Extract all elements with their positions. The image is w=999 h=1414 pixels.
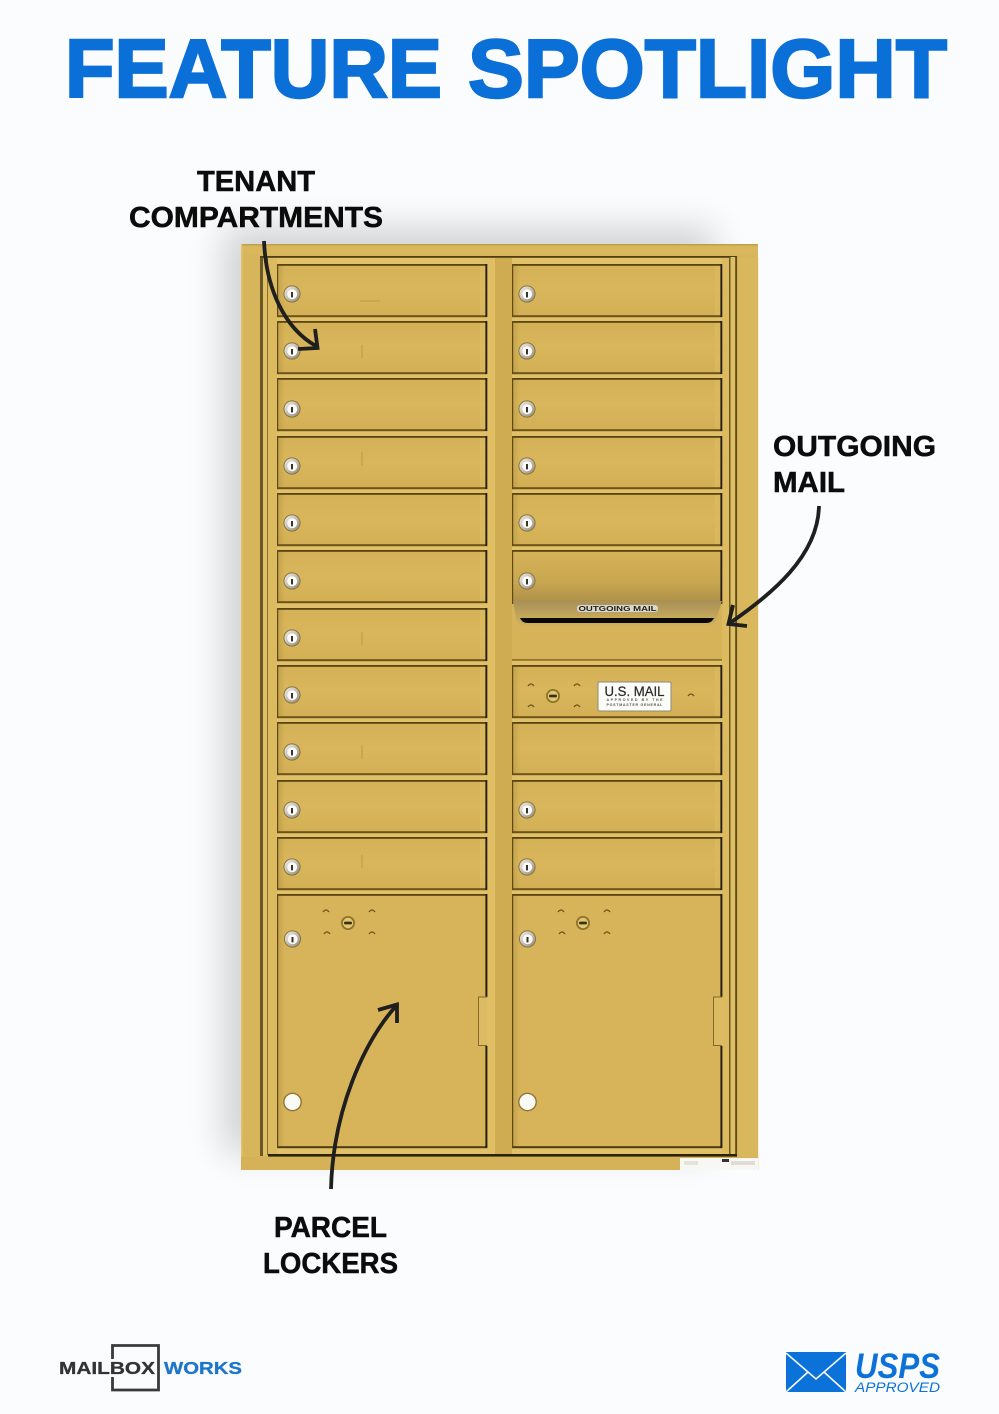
outgoing mail slot	[512, 601, 722, 661]
U.S. Mail plate	[598, 682, 671, 711]
title: FEATURE	[65, 22, 442, 115]
arrow: tenant compartments	[264, 241, 318, 349]
logo: Mailbox Works: WORKS	[164, 1358, 242, 1378]
left column compartments	[277, 264, 487, 890]
outer frame	[241, 244, 758, 1170]
logo: USPS Approved	[786, 1347, 940, 1395]
label: outgoing mail	[773, 431, 936, 499]
label: outgoing mail: MAIL	[773, 467, 845, 499]
parcel locker: right	[512, 894, 722, 1148]
title	[65, 22, 947, 115]
arrow: parcel lockers	[331, 1004, 397, 1189]
logo: USPS Approved: APPROVED	[854, 1379, 940, 1395]
logo: Mailbox Works: MAILBOX	[59, 1358, 155, 1378]
label: tenant compartments: COMPARTMENTS	[129, 202, 383, 234]
U.S. Mail plate: APPROVED BY THE	[606, 698, 663, 702]
parcel locker: left	[277, 894, 487, 1148]
arrow: outgoing mail	[728, 506, 819, 626]
U.S. Mail plate: U.S. MAIL	[604, 683, 665, 699]
label: parcel lockers: PARCEL	[274, 1212, 387, 1244]
right column lower compartments	[512, 722, 722, 890]
icon: envelope	[786, 1352, 846, 1392]
label: parcel lockers	[263, 1212, 398, 1280]
serial sticker	[680, 1158, 758, 1170]
logo: USPS Approved: USPS	[855, 1347, 940, 1386]
panel: mailbox unit	[241, 244, 758, 1170]
logo: Mailbox Works	[59, 1346, 242, 1390]
outgoing mail slot: OUTGOING MAIL	[578, 606, 657, 613]
U.S. Mail plate: POSTMASTER GENERAL	[606, 703, 663, 707]
label: tenant compartments: TENANT	[197, 166, 315, 198]
master lock panel with U.S. Mail plate	[512, 665, 722, 718]
label: tenant compartments	[129, 166, 383, 234]
mailbox drop shadow	[224, 228, 714, 1153]
right column compartments	[512, 264, 722, 604]
label: outgoing mail: OUTGOING	[773, 431, 936, 463]
label: parcel lockers: LOCKERS	[263, 1248, 398, 1280]
title: SPOTLIGHT	[468, 22, 947, 115]
